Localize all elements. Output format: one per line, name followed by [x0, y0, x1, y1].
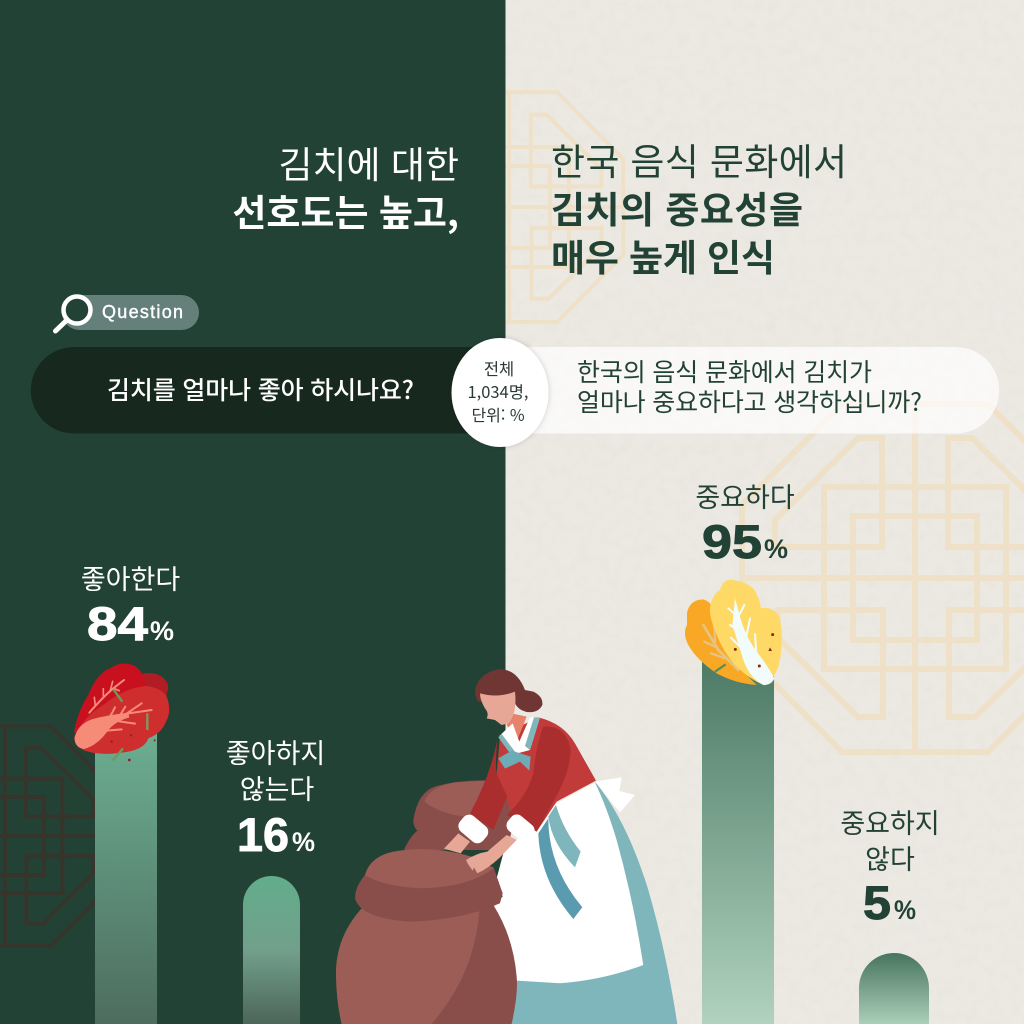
left hand: [444, 833, 470, 853]
label: not important 5%: [840, 802, 940, 929]
label: not important 5%: %: [894, 895, 916, 925]
label: dislike 16%: 좋아하지: [226, 732, 325, 771]
apron: [493, 783, 643, 983]
label: important 95%: 95: [702, 515, 762, 568]
icon: red kimchi: [74, 663, 169, 761]
sleeves: [470, 727, 571, 832]
sample size circle: 전체: [484, 356, 514, 380]
label: important 95%: %: [764, 534, 788, 564]
question pill: left: 김치를 얼마나 좋아 하시나요?: [107, 371, 414, 407]
panel: left dark green background: [0, 0, 506, 1024]
label: like 84%: %: [150, 616, 174, 646]
blouse: [497, 717, 596, 832]
heading: right: 매우 높게 인식: [551, 228, 775, 282]
heading: left: 선호도는 높고,: [232, 183, 459, 237]
question pill: left: [31, 347, 506, 434]
icon: magnifier: [56, 296, 90, 331]
heading: left: [232, 135, 459, 237]
bow tie: [498, 751, 531, 771]
heading: right: [551, 132, 847, 282]
bar: not important 5%: [859, 953, 929, 1024]
back jar: [404, 780, 518, 850]
label: dislike 16%: 않는다: [240, 768, 314, 807]
face: [480, 692, 515, 725]
question pill: right: 한국의 음식 문화에서 김치가: [577, 353, 872, 389]
label: like 84%: 좋아한다: [81, 558, 180, 597]
icon: yellow cabbage: [685, 580, 782, 685]
question pill: right: 얼마나 중요하다고 생각하십니까?: [577, 383, 922, 419]
neck: [507, 713, 527, 740]
lattice pattern: top right panel: [395, 92, 623, 322]
bar: like 84%: [95, 725, 157, 1024]
tag pill: [62, 295, 199, 330]
right cuff: [503, 812, 538, 845]
label: not important 5%: 중요하지: [840, 802, 940, 841]
label: important 95%: [695, 476, 795, 568]
heading: left: 김치에 대한: [278, 135, 459, 189]
sample size circle: [452, 338, 548, 447]
apron bow: [595, 777, 635, 813]
collar: [498, 717, 540, 754]
panel: right paper background: [505, 0, 1024, 1024]
sample size circle: 단위: %: [471, 402, 525, 426]
tag label: Question: [102, 302, 183, 322]
left cuff: [455, 812, 491, 846]
question tag: [56, 295, 199, 331]
label: dislike 16%: [226, 732, 325, 861]
label: not important 5%: 5: [863, 876, 891, 929]
lattice pattern: left dark panel: [0, 726, 114, 946]
question pill: right: [505, 347, 999, 434]
label: important 95%: 중요하다: [695, 476, 795, 515]
heading: right: 김치의 중요성을: [551, 180, 803, 234]
bar: dislike 16%: [243, 876, 300, 1024]
label: dislike 16%: %: [292, 827, 315, 857]
heading: right: 한국 음식 문화에서: [551, 132, 847, 186]
skirt: [512, 782, 677, 1024]
lattice pattern: large right panel: [742, 404, 1024, 752]
label: dislike 16%: 16: [237, 808, 289, 861]
hair: [475, 669, 542, 712]
sample size circle: 1,034명,: [467, 379, 529, 403]
bar: important 95%: [702, 660, 774, 1024]
label: like 84%: 84: [87, 597, 148, 650]
sash ribbons: [538, 805, 582, 919]
label: like 84%: [81, 558, 180, 650]
illustration: woman with jars: [336, 669, 677, 1024]
label: not important 5%: 않다: [865, 838, 915, 877]
right hand and forearm: [466, 835, 517, 873]
front jar: [336, 849, 517, 1024]
